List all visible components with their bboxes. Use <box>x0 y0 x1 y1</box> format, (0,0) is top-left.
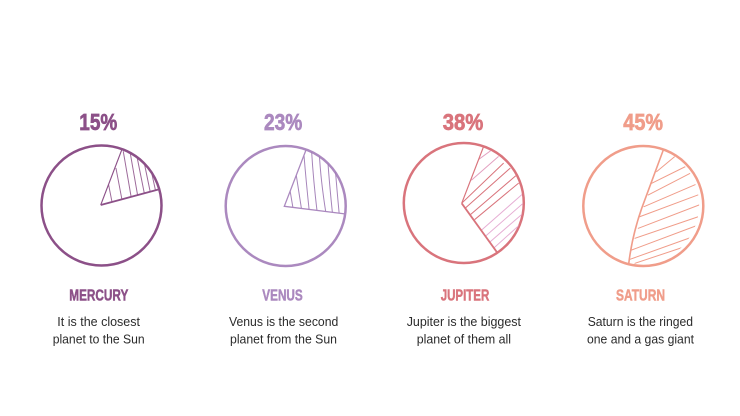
description: Venus <box>229 315 338 346</box>
description: Venus: Venus is the second <box>229 315 338 329</box>
pie chart: Jupiter 38% <box>404 143 525 263</box>
description: Mercury: It is the closest <box>57 315 141 329</box>
label: Venus: VENUS <box>262 288 303 305</box>
percentage: 23%: 23% <box>264 109 302 135</box>
pie chart: Mercury 15% <box>42 146 162 266</box>
description: Jupiter: planet of them all <box>417 332 511 346</box>
panel: Jupiter <box>404 109 525 346</box>
panel: Saturn <box>583 109 703 346</box>
percentage: 38%: 38% <box>443 109 483 135</box>
panel: Venus <box>226 109 346 346</box>
percentage: 45%: 45% <box>623 109 663 135</box>
label: Mercury: MERCURY <box>69 288 129 305</box>
panel: Mercury <box>42 109 162 346</box>
description: Jupiter: Jupiter is the biggest <box>407 315 522 329</box>
pie chart: Venus 23% <box>226 146 346 266</box>
percentage: 15%: 15% <box>79 109 117 135</box>
description: Saturn: Saturn is the ringed <box>588 315 693 329</box>
pie chart: Saturn 45% <box>583 146 703 266</box>
label: Saturn: SATURN <box>616 288 665 305</box>
description: Mercury <box>53 315 145 346</box>
description: Jupiter <box>407 315 522 346</box>
description: Venus: planet from the Sun <box>230 332 337 346</box>
label: Jupiter: JUPITER <box>441 288 490 305</box>
description: Saturn: one and a gas giant <box>587 332 695 346</box>
description: Saturn <box>587 315 695 346</box>
description: Mercury: planet to the Sun <box>53 332 145 346</box>
